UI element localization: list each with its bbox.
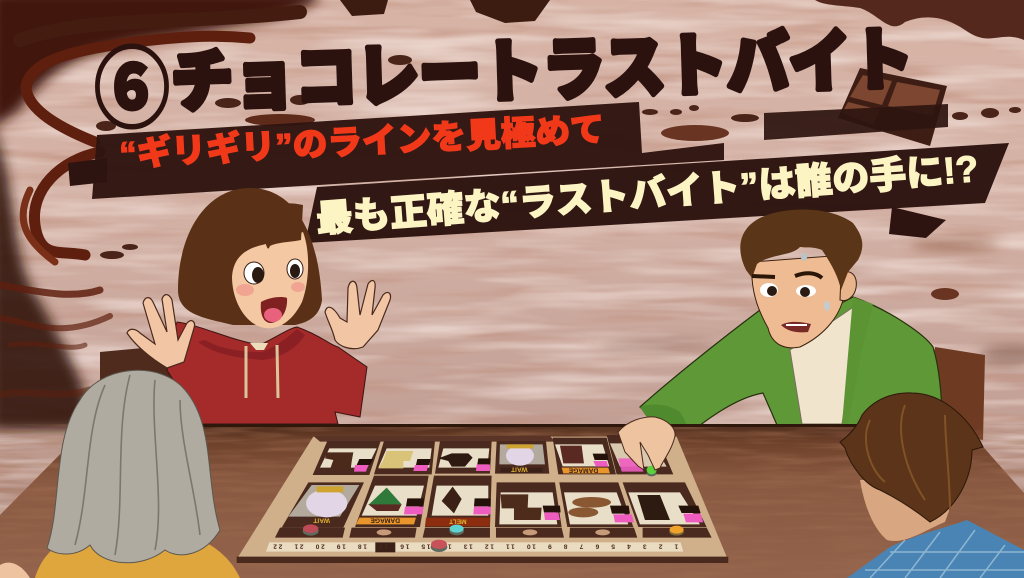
- number badge: ⑥: [94, 40, 170, 139]
- game board: [237, 435, 728, 563]
- figure: boy from behind: [840, 393, 1024, 578]
- chocolate swirl top left: [0, 12, 300, 395]
- left hand: [127, 295, 195, 368]
- upside-down card labels: [313, 466, 598, 524]
- right hand: [325, 281, 391, 349]
- upside-down card labels: WAIT: [313, 516, 330, 523]
- bottom row cards: [282, 476, 707, 528]
- ribbon shapes behind headline: [68, 102, 1009, 243]
- eyes and mouth: [244, 262, 264, 284]
- man hair: [740, 210, 862, 290]
- score track: [266, 542, 683, 552]
- ear: [840, 272, 856, 300]
- upside-down card labels: MELT: [449, 517, 467, 524]
- table: [0, 424, 1024, 578]
- upside-down card labels: WAIT: [511, 466, 528, 473]
- headline line 1: “ギリギリ”のラインを見極めて: [118, 111, 606, 174]
- figure: grandmother from behind: [0, 370, 240, 578]
- face: [232, 232, 308, 328]
- player tracks: [275, 528, 712, 538]
- man eyes, brows, mouth: [760, 283, 778, 297]
- top row cards: [313, 435, 673, 475]
- chocolate bar: [838, 68, 947, 146]
- hair back: [178, 188, 322, 325]
- upside-down card labels: DAMAGE: [370, 516, 400, 523]
- chocolate beans: [96, 55, 1021, 300]
- melted chocolate top right: [340, 0, 1024, 40]
- chair backs: [100, 346, 985, 440]
- figure: girl in red hoodie: [127, 188, 391, 424]
- upside-down card labels: DAMAGE: [568, 466, 598, 473]
- bangs: [228, 203, 303, 268]
- headline line 2: 最も正確な“ラストバイト”は誰の手に!?: [314, 148, 980, 240]
- figure: man in green cardigan: [640, 210, 942, 443]
- hand over board: [618, 417, 675, 470]
- score numbers: 1 2 3 4 5 6 7 8 9 10 11 12 13 14 15 16 17 18 19 20 21 22: [273, 542, 678, 549]
- title: チョコレートラストバイト: [170, 22, 914, 121]
- tokens: [303, 466, 684, 552]
- head: [752, 255, 845, 348]
